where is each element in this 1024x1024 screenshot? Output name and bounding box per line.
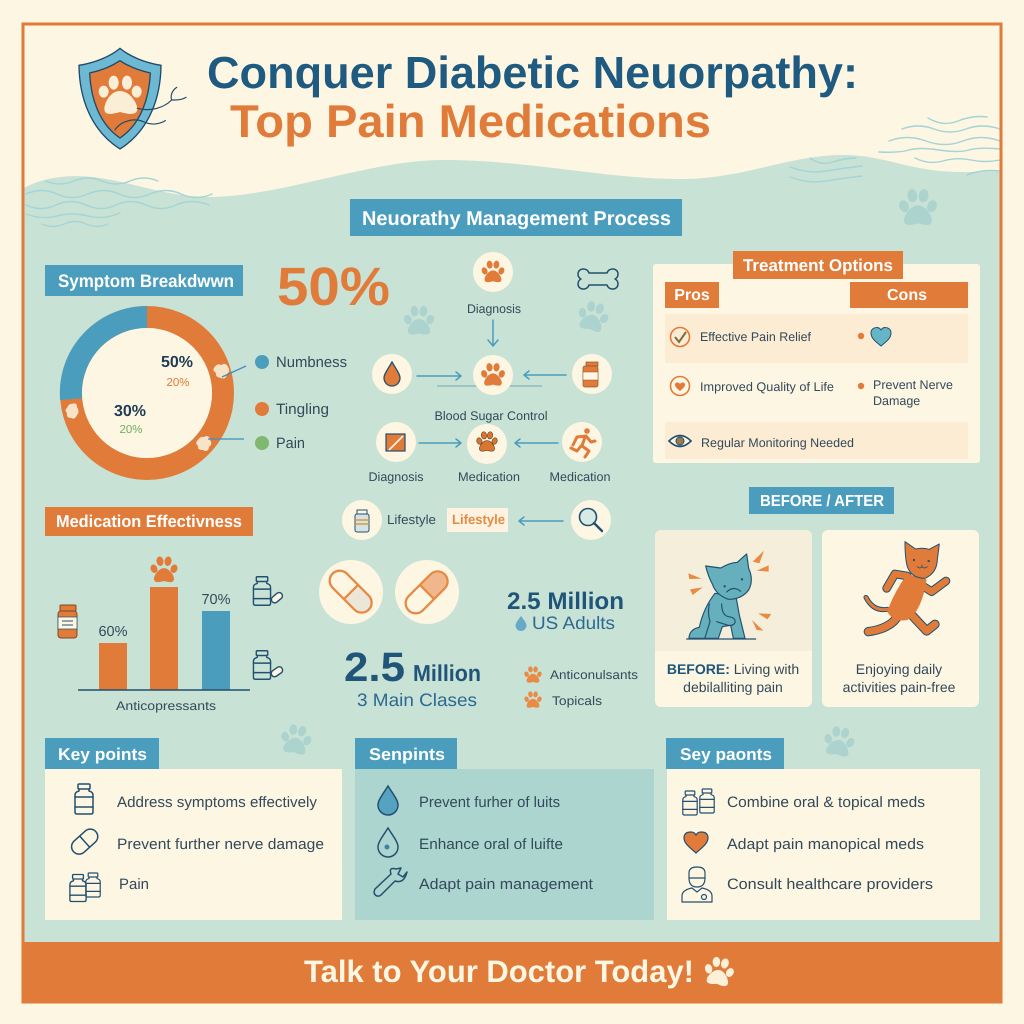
item text: Pain <box>119 876 149 893</box>
stat: 2.5 million us adults: 2.5 Million <box>507 588 624 615</box>
wave lines: top left <box>26 178 212 226</box>
flow label: Medication <box>550 470 611 484</box>
item text: Address symptoms effectively <box>117 794 317 811</box>
before caption line 2: debilalliting pain <box>683 679 783 695</box>
mint wave background <box>24 155 1000 942</box>
heading: management process <box>350 199 682 236</box>
panel heading: Sey paonts <box>680 745 772 764</box>
illustration: hurting cat <box>687 551 771 639</box>
list: drug classes: Anticonulsants <box>550 668 638 682</box>
arrow: left <box>524 371 566 379</box>
heading text: Treatment Options <box>743 256 893 275</box>
donut label: 50%: 50% <box>161 354 193 371</box>
icon: two bottles <box>683 789 714 815</box>
after caption: Enjoying daily <box>856 661 942 677</box>
heading: management process: Neuorathy Management Process <box>362 208 671 230</box>
heading: before / after <box>749 487 894 514</box>
bar label: 60%: 60% <box>98 624 128 640</box>
flow node: diagnosis paw <box>467 252 521 316</box>
arrow: right <box>419 439 461 447</box>
icon: capsule 2 <box>395 560 459 624</box>
donut label: 20% orange: 20% <box>166 377 190 389</box>
heading: symptom breakdown: Symptom Breakdwwn <box>58 271 234 291</box>
chart legend: Numbness <box>276 354 347 371</box>
column heading: pros <box>665 282 719 308</box>
call to action banner <box>22 942 1002 1002</box>
stat: 2.5 million 3 main classes: 2.5 <box>344 644 405 690</box>
flow label: Medication <box>458 470 520 484</box>
panel: key points <box>45 738 342 920</box>
axis label: Anticopressants <box>116 699 216 713</box>
heading: treatment options <box>733 251 903 279</box>
panel heading: Key points <box>58 745 147 764</box>
con bullet <box>858 383 864 389</box>
arrow: right <box>417 372 461 380</box>
classes label: 3 Main Clases <box>357 690 477 710</box>
donut label: 20% green: 20% <box>119 424 143 436</box>
icon: bone <box>578 269 618 289</box>
title line 2: Top Pain Medications <box>230 95 711 147</box>
flow: divider behind paw <box>437 385 542 387</box>
icon: capsule 1 <box>319 560 383 624</box>
donut chart <box>60 306 246 469</box>
flow label: Lifestyle <box>387 512 436 527</box>
flow node: medicine bottle <box>572 354 612 394</box>
arrow: down <box>488 320 498 346</box>
con bullet <box>858 333 864 339</box>
heading: medication effectiveness <box>45 507 253 536</box>
icon: bottle with pill <box>253 651 284 679</box>
icon: paw <box>701 954 737 988</box>
million label: Million <box>413 660 481 686</box>
chart legend: Tingling <box>276 401 329 418</box>
flow tag: lifestyle <box>447 508 508 532</box>
flow node: center paw <box>473 355 513 395</box>
panel heading: Senpints <box>369 745 445 764</box>
icon: wrench <box>374 868 407 896</box>
chart legend: Pain <box>276 435 305 452</box>
flow label: Diagnosis <box>467 302 521 316</box>
donut label: 30%: 30% <box>114 403 146 420</box>
icon: drop filled <box>378 786 398 815</box>
panel: senpints <box>355 738 654 920</box>
item text: Enhance oral of luifte <box>419 836 563 853</box>
panel: sey points <box>666 738 980 920</box>
heading: before / after: BEFORE / AFTER <box>760 493 884 510</box>
heading: medication effectiveness: Medication Effectivness <box>56 512 242 531</box>
wave lines: top right <box>790 116 1000 182</box>
bar label: 70%: 70% <box>201 592 231 608</box>
icon: two bottles <box>70 873 100 902</box>
icon: drop <box>516 616 526 631</box>
item text: Prevent furher of luits <box>419 794 560 811</box>
icon: heart <box>684 832 708 853</box>
panel: treatment options <box>653 251 980 463</box>
stat: 2.5 million us adults <box>507 588 624 633</box>
icon: paw above bar <box>149 556 179 582</box>
icon: bottle with pill <box>253 577 284 605</box>
big stat: 50%: 50% <box>277 257 390 317</box>
column heading: cons <box>850 282 968 308</box>
con: prevent nerve damage: Prevent Nerve <box>873 378 953 392</box>
panel: before card <box>655 530 812 707</box>
icon: heart circle <box>670 376 690 396</box>
icon: drop outline <box>378 828 398 857</box>
list: drug classes <box>524 666 638 708</box>
flow label: Diagnosis <box>368 470 424 484</box>
icon: check <box>670 328 690 346</box>
arrow: left <box>515 439 558 447</box>
call to action banner: Talk to Your Doctor Today! <box>304 954 694 989</box>
flow node: runner <box>550 422 611 484</box>
icon: doctor <box>682 867 712 902</box>
con: prevent nerve damage: Damage <box>873 394 920 408</box>
item text: Prevent further nerve damage <box>117 836 324 853</box>
pro: quality of life: Improved Quality of Life <box>700 380 834 394</box>
flow node: diagnosis chart <box>368 422 424 484</box>
illustration: running cat <box>866 542 946 632</box>
icon: blue heart <box>871 328 891 346</box>
item text: Consult healthcare providers <box>727 876 933 893</box>
icon: eye <box>669 436 691 446</box>
flow tag: lifestyle: Lifestyle <box>452 512 505 527</box>
item text: Adapt pain manopical meds <box>727 836 924 853</box>
flow node: blood drop <box>372 354 412 394</box>
us adults label: US Adults <box>532 613 615 633</box>
flow node: medication glove <box>458 424 520 484</box>
row: regular monitoring: Regular Monitoring Needed <box>701 436 854 450</box>
icon: pill <box>68 826 101 857</box>
stat: 2.5 million 3 main classes <box>344 644 481 710</box>
cons text: Cons <box>887 287 927 304</box>
item text: Adapt pain management <box>419 876 594 893</box>
flow node: lifestyle bottle <box>342 500 436 540</box>
icon: bottle <box>75 784 93 814</box>
title line 1: Conquer Diabetic Neuorpathy: <box>207 47 858 98</box>
before caption: BEFORE: Living with <box>667 661 799 677</box>
arrow: left <box>519 517 563 525</box>
icon: orange bottle <box>58 605 77 638</box>
flow label: blood sugar control: Blood Sugar Control <box>434 409 548 423</box>
background paw prints <box>277 188 939 758</box>
panel: after card <box>822 530 979 707</box>
list: drug classes: Topicals <box>552 694 602 708</box>
icon: shield with paw and nerves <box>79 48 186 149</box>
chart legend <box>255 354 347 452</box>
after caption: activities pain-free <box>843 679 956 695</box>
pros text: Pros <box>674 287 710 304</box>
heading: symptom breakdown <box>45 265 243 296</box>
item text: Combine oral & topical meds <box>727 794 925 811</box>
pro: pain relief: Effective Pain Relief <box>700 330 812 344</box>
flow node: magnifier <box>571 500 611 540</box>
bar chart <box>78 556 250 713</box>
